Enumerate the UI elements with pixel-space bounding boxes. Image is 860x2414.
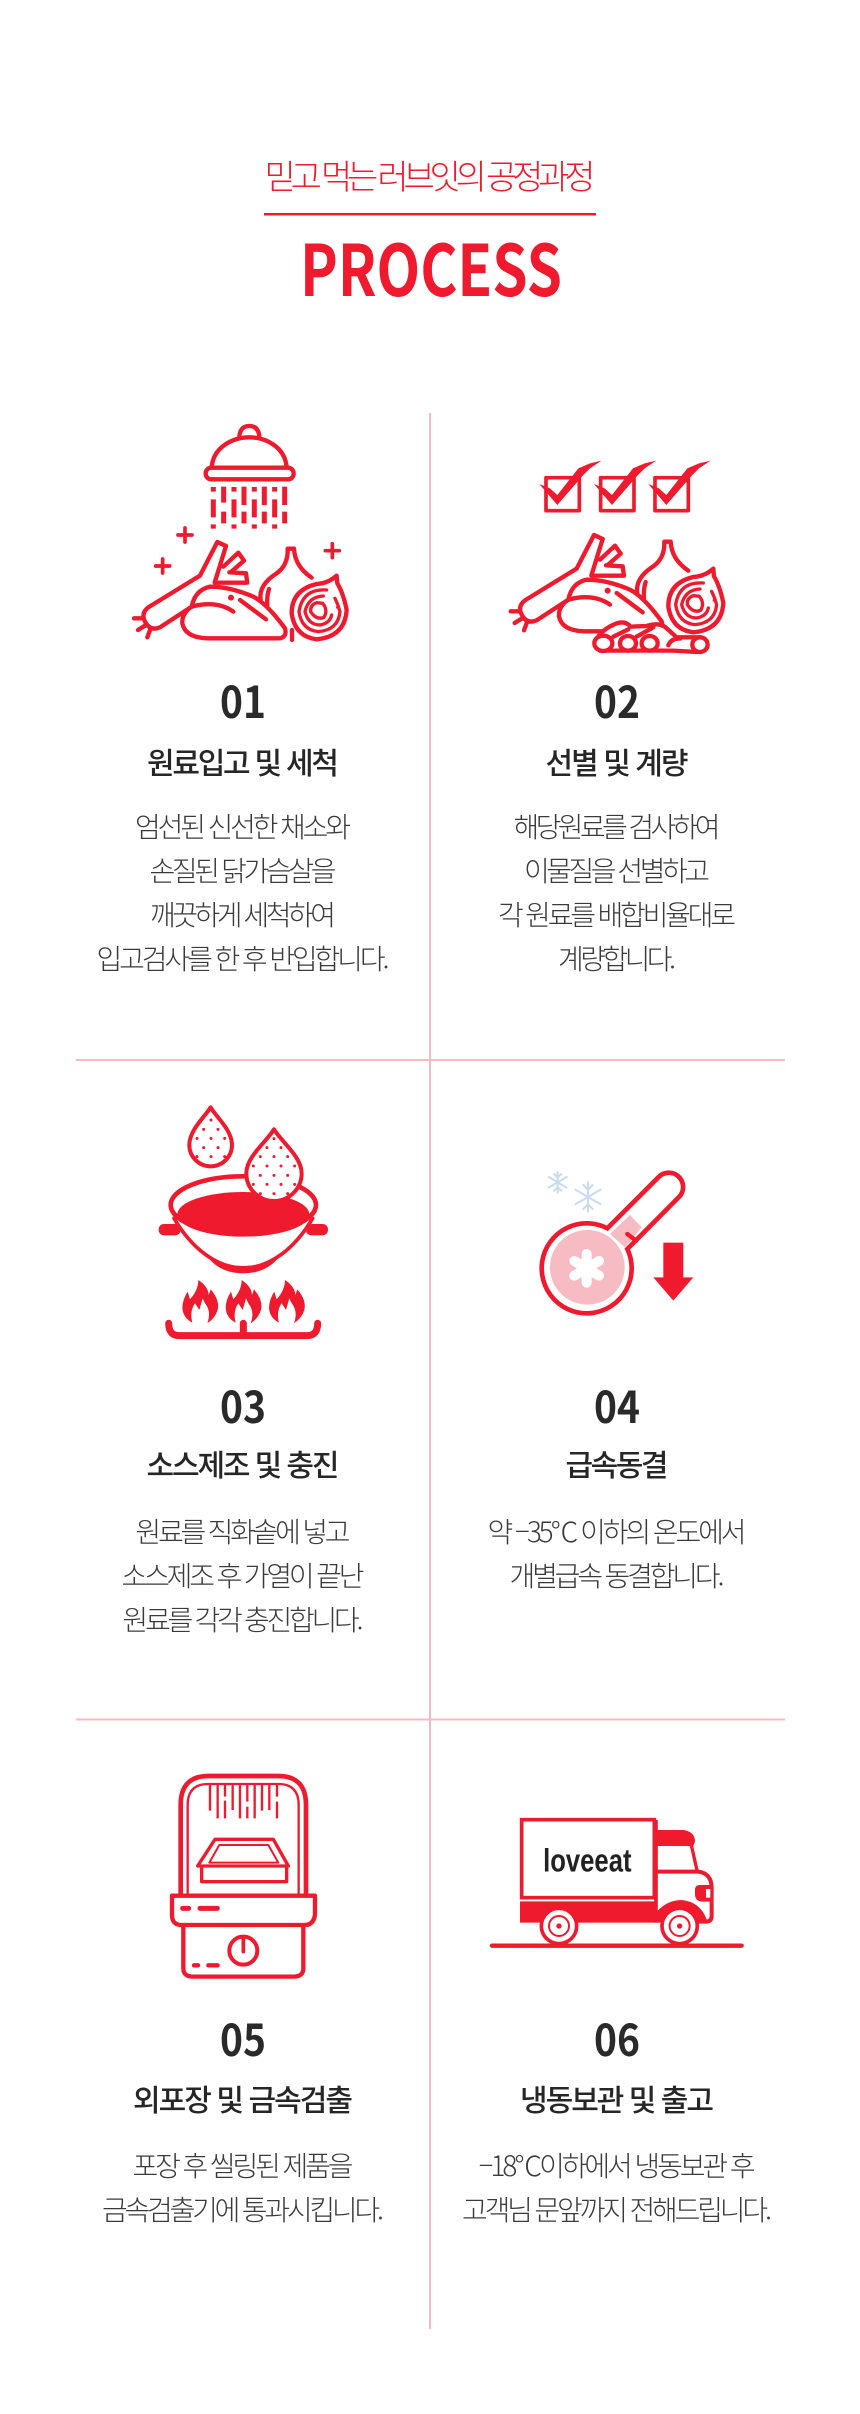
description: 약 –35℃ 이하의 온도에서 bbox=[488, 1511, 746, 1551]
description: 계량합니다. bbox=[558, 938, 676, 978]
icon: shower over vegetables bbox=[134, 426, 347, 640]
icon: sauce pot on flames bbox=[159, 1107, 328, 1336]
number 06: 06 bbox=[594, 2005, 640, 2069]
header bbox=[264, 150, 596, 317]
description bbox=[488, 1511, 746, 1595]
description bbox=[462, 2145, 772, 2229]
description: 고객님 문앞까지 전해드립니다. bbox=[462, 2189, 772, 2229]
description: 해당원료를 검사하여 bbox=[514, 806, 720, 846]
heading: 외포장 및 금속검출 bbox=[133, 2076, 353, 2120]
icon: checkboxes over ingredients bbox=[511, 461, 723, 652]
number 04: 04 bbox=[594, 1372, 640, 1436]
description: 금속검출기에 통과시킵니다. bbox=[102, 2189, 384, 2229]
number 01: 01 bbox=[220, 667, 266, 731]
description: 원료를 각각 충진합니다. bbox=[122, 1599, 364, 1639]
icon: metal detector machine bbox=[172, 1776, 315, 1977]
panel: step 04 bbox=[488, 1172, 746, 1595]
panel: step 02 bbox=[498, 461, 736, 978]
description bbox=[498, 806, 736, 978]
panel: step 06 bbox=[462, 1820, 772, 2229]
heading: 소스제조 및 충진 bbox=[146, 1441, 340, 1485]
icon: thermometer with snowflakes and down arrow bbox=[542, 1172, 693, 1313]
panel: step 05 bbox=[102, 1776, 384, 2229]
description: 각 원료를 배합비율대로 bbox=[498, 894, 736, 934]
description: 깨끗하게 세척하여 bbox=[150, 894, 336, 934]
description: 이물질을 선별하고 bbox=[524, 850, 710, 890]
heading: 냉동보관 및 출고 bbox=[520, 2076, 714, 2120]
description bbox=[102, 2145, 384, 2229]
heading: 원료입고 및 세척 bbox=[147, 739, 339, 783]
description: 개별급속 동결합니다. bbox=[510, 1555, 724, 1595]
title: PROCESS: PROCESS bbox=[300, 215, 562, 317]
logo: loveeat: loveeat bbox=[543, 1842, 632, 1878]
description: 소스제조 후 가열이 끝난 bbox=[122, 1555, 364, 1595]
number 03: 03 bbox=[220, 1372, 266, 1436]
description: 손질된 닭가슴살을 bbox=[150, 850, 336, 890]
heading: 선별 및 계량 bbox=[546, 739, 688, 783]
panel: step 03 bbox=[122, 1107, 364, 1639]
subtitle: 믿고 먹는 러브잇의 공정과정 bbox=[264, 150, 596, 199]
description: 원료를 직화솥에 넣고 bbox=[136, 1511, 350, 1551]
heading: 급속동결 bbox=[566, 1441, 668, 1485]
description: 입고검사를 한 후 반입합니다. bbox=[96, 938, 390, 978]
icon: delivery truck bbox=[492, 1820, 742, 1946]
description: –18℃이하에서 냉동보관 후 bbox=[478, 2145, 756, 2185]
description bbox=[122, 1511, 364, 1639]
description: 엄선된 신선한 채소와 bbox=[135, 806, 351, 846]
panel: step 01 bbox=[96, 426, 390, 978]
description: 포장 후 씰링된 제품을 bbox=[132, 2145, 354, 2185]
description bbox=[96, 806, 390, 978]
number 05: 05 bbox=[220, 2005, 266, 2069]
number 02: 02 bbox=[594, 667, 640, 731]
